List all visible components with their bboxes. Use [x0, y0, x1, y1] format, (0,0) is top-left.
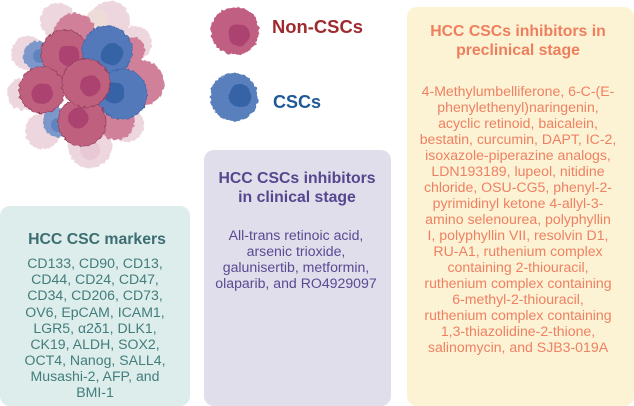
- heading: preclinical stage: preclinical stage: [456, 42, 580, 59]
- text block: preclinical inhibitors list: amino selenourea, polyphyllin: [425, 211, 611, 227]
- text block: preclinical inhibitors list: salinomycin, and SJB3-019A: [428, 339, 609, 355]
- legend label: Non-CSCs: Non-CSCs: [272, 16, 363, 37]
- text block: preclinical inhibitors list: RU-A1, ruthenium complex: [433, 243, 603, 259]
- heading: preclinical stage: [430, 23, 606, 59]
- text block: preclinical inhibitors list: ruthenium complex containing: [424, 275, 612, 291]
- text block: marker list: CK19, ALDH, SOX2,: [30, 336, 160, 352]
- panel: inhibitors in preclinical stage: [407, 7, 634, 406]
- text block: preclinical inhibitors list: 1,3-thiazolidine-2-thione,: [441, 323, 595, 339]
- text block: preclinical inhibitors list: containing 2-thiouracil,: [447, 259, 589, 275]
- text block: preclinical inhibitors list: [420, 83, 616, 355]
- text block: preclinical inhibitors list: phenylethenyl)naringenin,: [437, 99, 599, 115]
- text block: marker list: BMI-1: [76, 384, 114, 400]
- text block: preclinical inhibitors list: chloride, OSU-CG5, phenyl-2-: [424, 179, 612, 195]
- text block: marker list: CD133, CD90, CD13,: [27, 255, 163, 271]
- heading: HCC CSC markers: HCC CSC markers: [28, 231, 166, 248]
- text block: marker list: LGR5, α2δ1, DLK1,: [33, 320, 157, 336]
- text block: marker list: CD34, CD206, CD73,: [27, 287, 163, 303]
- text block: preclinical inhibitors list: ruthenium complex containing: [424, 307, 612, 323]
- heading: clinical stage: HCC CSCs inhibitors: [218, 170, 376, 187]
- text block: clinical inhibitors list: All-trans retinoic acid,: [229, 227, 363, 243]
- text block: preclinical inhibitors list: bestatin, curcumin, DAPT, IC-2,: [420, 131, 616, 147]
- icon: tumor cell cluster: [7, 1, 164, 168]
- text block: preclinical inhibitors list: acyclic retinoid, baicalein,: [438, 115, 598, 131]
- panel: HCC CSC markers: [0, 206, 190, 406]
- text block: preclinical inhibitors list: pyrimidinyl ketone 4-allyl-3-: [433, 195, 604, 211]
- text block: preclinical inhibitors list: 4-Methylumbelliferone, 6-C-(E-: [422, 83, 615, 99]
- heading: clinical stage: [218, 170, 376, 206]
- text block: marker list: CD44, CD24, CD47,: [31, 271, 159, 287]
- heading: clinical stage: in clinical stage: [238, 189, 356, 206]
- panel: inhibitors in clinical stage: [204, 150, 391, 406]
- text block: clinical inhibitors list: arsenic trioxide,: [247, 243, 345, 259]
- text block: preclinical inhibitors list: 6-methyl-2-thiouracil,: [452, 291, 584, 307]
- icon: CSC cell: [210, 73, 258, 121]
- text block: clinical inhibitors list: olaparib, and RO4929097: [215, 275, 377, 291]
- icon: non-CSC cell: [211, 7, 259, 55]
- text block: preclinical inhibitors list: LDN193189, lupeol, nitidine: [431, 163, 605, 179]
- text block: marker list: Musashi-2, AFP, and: [30, 368, 160, 384]
- text block: marker list: [24, 255, 166, 400]
- text block: marker list: OCT4, Nanog, SALL4,: [24, 352, 166, 368]
- text block: marker list: OV6, EpCAM, ICAM1,: [25, 304, 165, 320]
- text block: preclinical inhibitors list: isoxazole-piperazine analogs,: [425, 147, 611, 163]
- heading: preclinical stage: HCC CSCs inhibitors in: [430, 23, 606, 40]
- legend label: CSCs: CSCs: [273, 92, 321, 112]
- text block: clinical inhibitors list: galunisertib, metformin,: [223, 259, 369, 275]
- text block: preclinical inhibitors list: I, polyphyllin VII, resolvin D1,: [428, 227, 608, 243]
- text block: clinical inhibitors list: [215, 227, 377, 291]
